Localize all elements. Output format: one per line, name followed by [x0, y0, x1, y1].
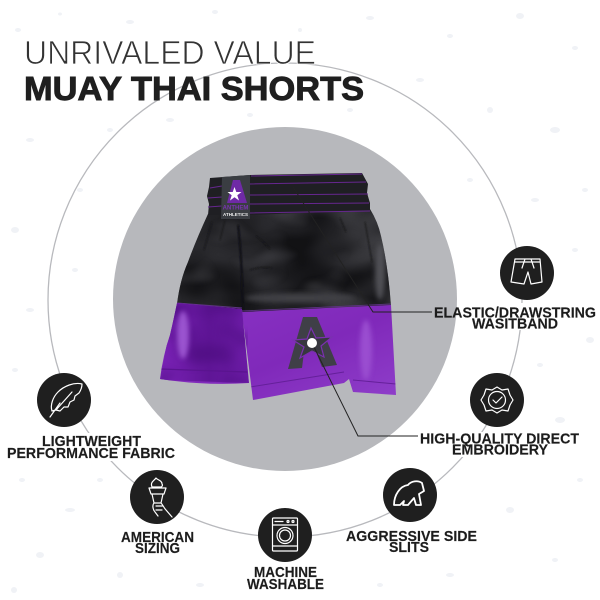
feature: machine washable [247, 508, 324, 593]
icon: shorts [500, 246, 554, 300]
label knockout and text: PERFORMANCE FABRIC [7, 446, 175, 462]
label: AMERICAN [121, 530, 194, 546]
waist label: ATHLETICS [223, 212, 248, 217]
label knockout and text: ELASTIC/DRAWSTRING [434, 306, 596, 322]
icon: feather [37, 373, 91, 427]
label knockout and text [7, 433, 175, 462]
purple lower panel [160, 303, 396, 400]
label: AGGRESSIVE SIDE [346, 529, 477, 545]
label knockout and text: WASITBAND [472, 316, 558, 332]
title line 1: UNRIVALED VALUE [24, 35, 316, 72]
icon: gorilla [383, 468, 437, 522]
black upper body [177, 209, 391, 312]
label knockout and text: EMBROIDERY [452, 442, 548, 458]
label A mark [227, 180, 247, 203]
icon: badge check [470, 373, 524, 427]
icon: washing machine [258, 508, 312, 562]
waistband purple stitching [208, 174, 370, 213]
fold lines [204, 218, 372, 270]
icon: torch [130, 470, 184, 524]
label [121, 530, 194, 557]
leader line: embroidery [312, 343, 418, 436]
embroidered A star logo [288, 317, 337, 369]
label knockout and text [434, 303, 596, 332]
label text: ANTHEM [223, 206, 248, 212]
label star [228, 187, 242, 200]
outer ring [48, 63, 522, 537]
label knockout and text: LIGHTWEIGHT [42, 434, 141, 450]
feature: american sizing [121, 470, 194, 557]
waistband [207, 173, 370, 215]
title line 2: MUAY THAI SHORTS [24, 70, 364, 107]
title [24, 35, 364, 107]
feature: lightweight fabric [7, 373, 175, 462]
panel seam [238, 225, 243, 313]
label: MACHINE [254, 565, 317, 581]
leader line: waistband [293, 187, 432, 312]
label knockout and text [420, 432, 579, 458]
feature: side slits [346, 468, 477, 556]
label: SIZING [135, 541, 180, 557]
label [247, 565, 324, 593]
seam stitching [177, 303, 391, 311]
illustration: muay thai shorts [155, 173, 400, 405]
label [346, 529, 477, 556]
label: SLITS [389, 540, 429, 556]
label knockout and text: HIGH-QUALITY DIRECT [420, 432, 579, 448]
waist label [221, 175, 250, 219]
label: WASHABLE [247, 577, 324, 593]
feature: waistband [434, 246, 596, 332]
marker dot [307, 338, 317, 348]
central grey circle [113, 127, 457, 471]
feature: embroidery [420, 373, 579, 458]
